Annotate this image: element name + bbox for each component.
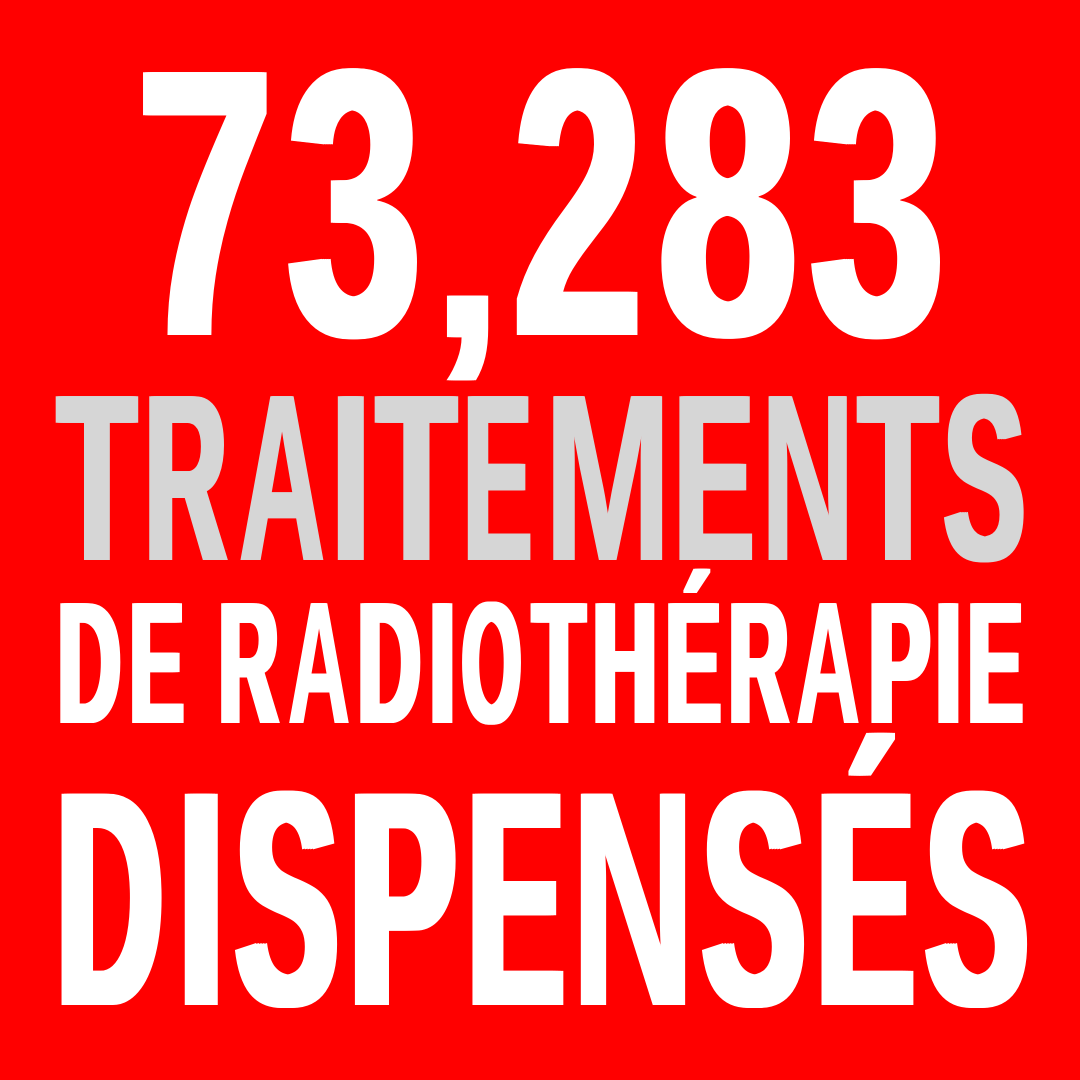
heading: TRAITEMENTS: A bbox=[238, 346, 325, 611]
headline number: 73,283: 3 bbox=[287, 0, 421, 416]
subheading: DE RADIOTHÉRAPIE: T bbox=[533, 565, 584, 760]
closing word: DISPENSÉS: E bbox=[468, 728, 563, 1071]
headline number: 73,283 bbox=[137, 0, 944, 416]
subheading: DE RADIOTHÉRAPIE: R bbox=[729, 565, 788, 760]
subheading: DE RADIOTHÉRAPIE: É bbox=[666, 565, 720, 760]
closing word: DISPENSÉS: É bbox=[817, 728, 914, 1071]
subheading: DE RADIOTHÉRAPIE: P bbox=[869, 565, 929, 760]
heading: TRAITEMENTS: S bbox=[944, 346, 1025, 611]
subheading: DE RADIOTHÉRAPIE: E bbox=[130, 565, 183, 760]
closing word: DISPENSÉS: S bbox=[236, 728, 337, 1071]
subheading: DE RADIOTHÉRAPIE: A bbox=[288, 565, 350, 760]
subheading: DE RADIOTHÉRAPIE: D bbox=[358, 565, 420, 760]
subheading: DE RADIOTHÉRAPIE: I bbox=[430, 565, 454, 760]
headline number: 73,283: 2 bbox=[513, 0, 643, 416]
subheading: DE RADIOTHÉRAPIE: O bbox=[462, 565, 521, 760]
closing word: DISPENSÉS: I bbox=[180, 728, 223, 1071]
closing word: DISPENSÉS: N bbox=[571, 728, 695, 1071]
heading: TRAITEMENTS: E bbox=[675, 346, 753, 611]
headline number: 73,283: 3 bbox=[810, 0, 944, 416]
heading: TRAITEMENTS: T bbox=[859, 346, 937, 611]
subheading: DE RADIOTHÉRAPIE: D bbox=[58, 565, 120, 760]
closing word: DISPENSÉS: P bbox=[350, 728, 455, 1071]
heading: TRAITEMENTS: R bbox=[145, 346, 227, 611]
closing word: DISPENSÉS: S bbox=[926, 728, 1027, 1071]
closing word: DISPENSÉS: D bbox=[57, 728, 163, 1071]
heading: TRAITEMENTS: E bbox=[464, 346, 532, 611]
closing word: DISPENSÉS: S bbox=[703, 728, 804, 1071]
subheading: DE RADIOTHÉRAPIE: E bbox=[968, 565, 1022, 760]
heading: TRAITEMENTS: T bbox=[58, 346, 136, 611]
subheading: DE RADIOTHÉRAPIE: R bbox=[219, 565, 278, 760]
heading: TRAITEMENTS bbox=[56, 346, 1027, 1008]
closing word: DISPENSÉS bbox=[57, 728, 1028, 1071]
heading: TRAITEMENTS: I bbox=[333, 346, 369, 611]
subheading: DE RADIOTHÉRAPIE bbox=[58, 565, 1023, 760]
subheading: DE RADIOTHÉRAPIE: I bbox=[936, 565, 960, 760]
subheading: DE RADIOTHÉRAPIE: A bbox=[796, 565, 860, 760]
headline number: 73,283: 7 bbox=[137, 0, 273, 416]
heading: TRAITEMENTS: M bbox=[544, 346, 671, 611]
headline number: 73,283: 8 bbox=[658, 0, 797, 416]
headline number: 73,283: , bbox=[435, 84, 499, 396]
heading: TRAITEMENTS: N bbox=[761, 346, 855, 611]
subheading: DE RADIOTHÉRAPIE: H bbox=[593, 565, 656, 760]
heading: TRAITEMENTS: T bbox=[377, 346, 456, 611]
